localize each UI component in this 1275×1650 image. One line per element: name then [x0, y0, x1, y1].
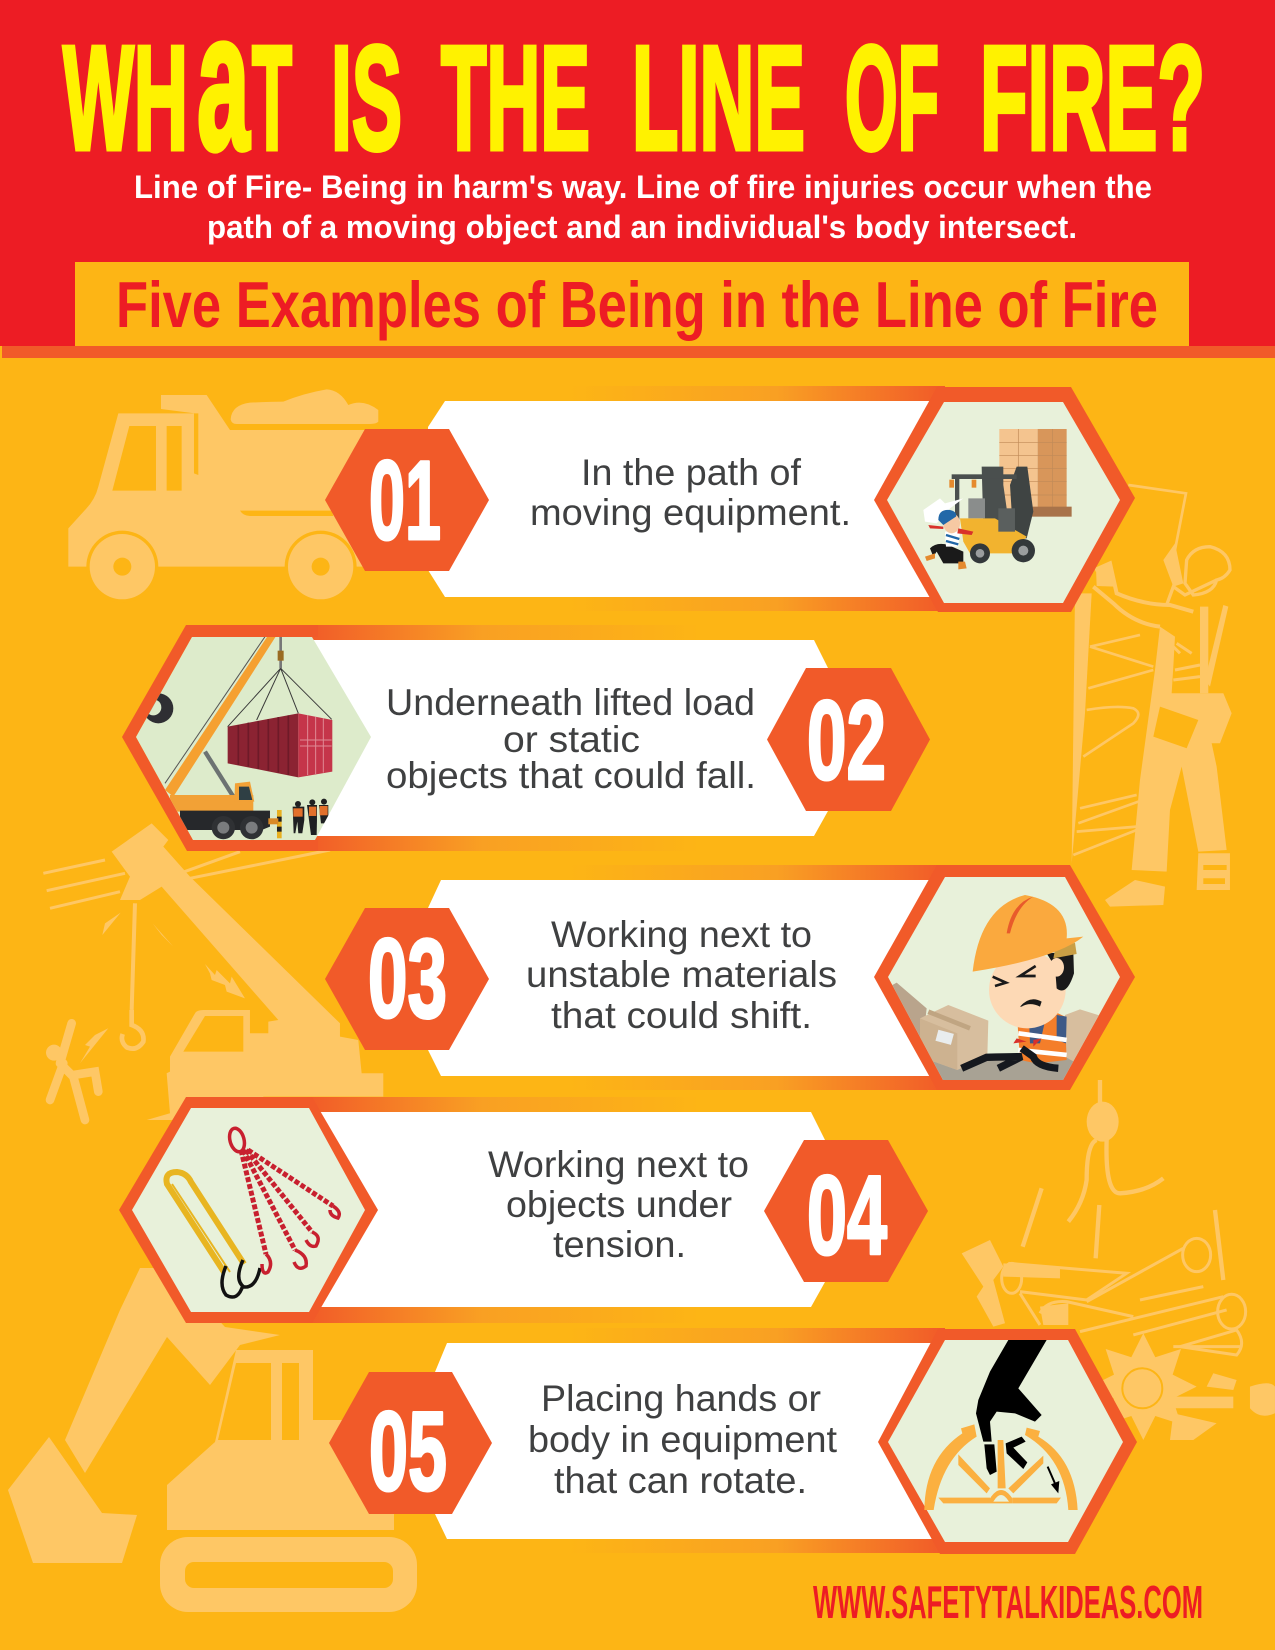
number badge 01: 01 [369, 438, 441, 563]
panel: example 03 [325, 865, 1135, 1090]
text 04 [488, 1144, 749, 1265]
text 03 [526, 914, 837, 1036]
number badge 05 [329, 1372, 492, 1514]
background silhouette: climbing worker [1072, 485, 1232, 907]
white band 04 [310, 1112, 825, 1307]
subtitle: Line of Fire- Being in harm's way. Line of fire injuries occur when the [134, 169, 1152, 205]
text 02: objects that could fall. [386, 755, 756, 796]
text 02: or static [503, 719, 640, 760]
white band 01 [428, 401, 945, 597]
icon: forklift in hexagon [874, 387, 1135, 612]
text 04: objects under [506, 1184, 732, 1225]
text 01 [530, 452, 851, 533]
title: THE [441, 16, 590, 181]
text 04: Working next to [488, 1144, 749, 1185]
title: OF [845, 16, 939, 181]
background silhouette: hanging rope and falling logs [962, 1080, 1275, 1440]
panel: example 04 [119, 1097, 928, 1323]
text 03: unstable materials [526, 954, 837, 995]
icon: hand near rotating guard in hexagon [878, 1329, 1137, 1554]
number badge 01 [325, 429, 489, 571]
accent bars 03 [570, 865, 945, 1090]
text 03: Working next to [551, 914, 812, 955]
text 05: body in equipment [528, 1419, 838, 1460]
accent bars 02 [305, 625, 700, 851]
banner [75, 262, 1189, 346]
background silhouette: excavator [8, 1268, 417, 1612]
background silhouette: crane [43, 823, 383, 1120]
panel: example 05 [329, 1328, 1137, 1554]
white band 05 [435, 1343, 945, 1539]
text 04: tension. [553, 1224, 686, 1265]
header panel [0, 0, 1275, 346]
number badge 02: 02 [807, 678, 886, 803]
icon: sling and chains in hexagon [119, 1097, 378, 1323]
title: IS [331, 16, 402, 181]
number badge 05: 05 [369, 1389, 447, 1514]
divider strip [2, 346, 1275, 358]
accent bars 05 [570, 1328, 945, 1553]
icon: crane lifting container in hexagon [122, 625, 371, 851]
text 05: that can rotate. [554, 1460, 807, 1501]
text 03: that could shift. [551, 995, 812, 1036]
title: WH [63, 16, 188, 181]
icon: injured worker with boxes in hexagon [874, 865, 1135, 1090]
number badge 02 [767, 668, 930, 811]
text 01: moving equipment. [530, 492, 851, 533]
subtitle: path of a moving object and an individual's body intersect. [207, 209, 1077, 245]
subtitle [134, 169, 1152, 245]
title: T [252, 16, 292, 181]
text 05 [528, 1378, 838, 1501]
white band 03 [428, 880, 945, 1076]
accent bars 04 [305, 1097, 700, 1323]
panel: example 02 [122, 625, 930, 851]
text 02: Underneath lifted load [386, 682, 755, 723]
title: LINE [632, 16, 805, 181]
number badge 03 [325, 908, 489, 1050]
accent bars 01 [570, 386, 945, 611]
text 01: In the path of [581, 452, 802, 493]
number badge 04 [764, 1140, 928, 1282]
panel: example 01 [325, 386, 1135, 612]
background silhouette: dump truck [68, 389, 378, 603]
number badge 04: 04 [807, 1153, 887, 1278]
title [63, 0, 1205, 191]
text 05: Placing hands or [541, 1378, 821, 1419]
white band 02 [300, 640, 828, 836]
text 02 [386, 682, 756, 796]
number badge 03: 03 [368, 916, 447, 1041]
